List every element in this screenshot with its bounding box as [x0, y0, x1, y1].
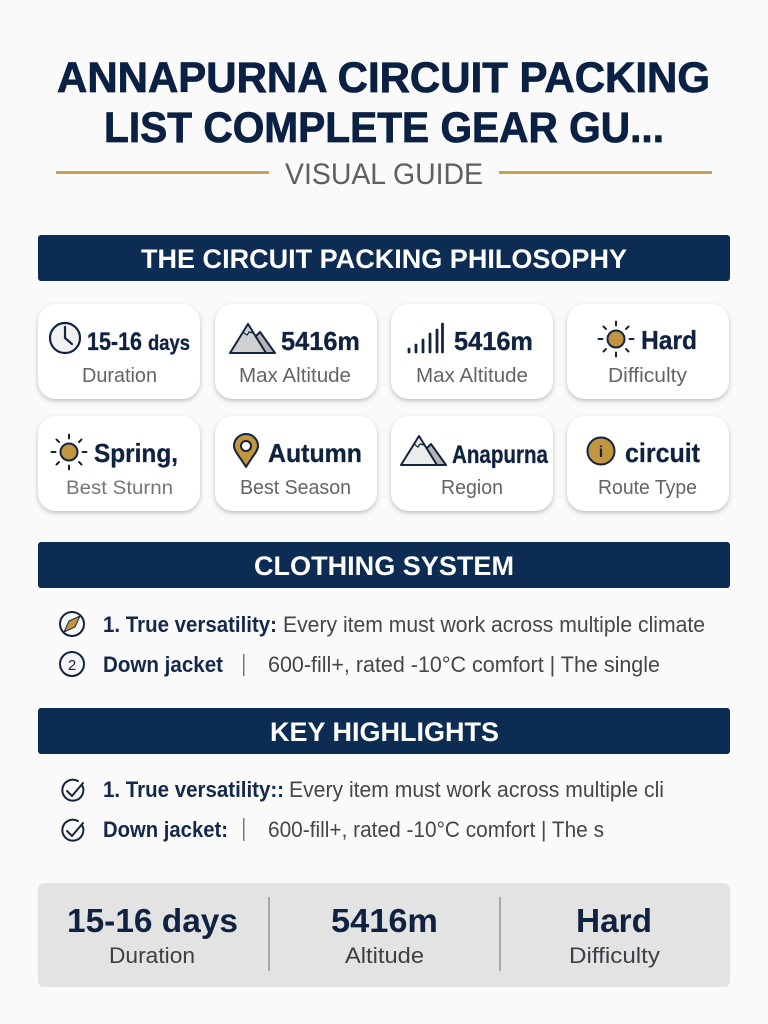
item: down jacket: Down jacket:: [103, 817, 228, 842]
item: true versatility: [103, 612, 705, 637]
item: down jacket: [103, 652, 660, 677]
item: true versatility: Every item must work across multiple cli: [289, 777, 664, 802]
value: circuit: circuit: [625, 438, 700, 468]
value: spring: Spring,: [94, 438, 178, 468]
stat: difficulty: [569, 902, 660, 968]
label: duration: Duration: [82, 365, 157, 387]
value: 5416m: 5416m: [281, 326, 360, 356]
value: hard: Hard: [641, 325, 697, 355]
stat: duration: Duration: [109, 943, 195, 968]
title: LIST COMPLETE GEAR GU...: [104, 104, 664, 152]
label: route type: Route Type: [598, 477, 697, 499]
value: anapurna: Anapurna: [452, 441, 549, 469]
label: difficulty: Difficulty: [608, 365, 687, 387]
heading: clothing system: CLOTHING SYSTEM: [254, 551, 514, 581]
icon: number 2: [60, 652, 84, 676]
icon: sun: [52, 434, 86, 470]
icon: number 2: 2: [68, 657, 76, 674]
item: down jacket: 600-fill+, rated -10°C comfort | The single: [268, 652, 660, 677]
card: max altitude bars: [391, 304, 553, 399]
stat: duration: 15-16 days: [67, 902, 238, 939]
item: down jacket: [103, 817, 604, 842]
value: 15-16 days: [87, 328, 190, 356]
heading: key highlights: [38, 708, 730, 754]
icon: check: [62, 780, 83, 801]
item: down jacket: 600-fill+, rated -10°C comfort | The s: [268, 817, 604, 842]
list: key highlights: [62, 777, 664, 842]
card: duration: [38, 304, 200, 399]
heading: the circuit packing philosophy: [38, 235, 730, 281]
label: best season: Best Season: [240, 477, 351, 499]
stat: difficulty: Difficulty: [569, 943, 660, 968]
item: true versatility: Every item must work across multiple climate: [283, 612, 705, 637]
icon: clock: [50, 323, 80, 353]
label: region: Region: [441, 477, 503, 499]
list: clothing system: [60, 612, 705, 677]
icon: compass: [60, 612, 84, 636]
stat: duration: [67, 902, 238, 968]
value: autumn: Autumn: [268, 438, 362, 468]
stat: altitude: [331, 902, 438, 968]
icon: check: [62, 820, 83, 841]
value: 15-16 days: days: [148, 332, 190, 355]
heading: the circuit packing philosophy: THE CIRCUIT PACKING PHILOSOPHY: [141, 244, 627, 274]
stat: difficulty: Hard: [576, 902, 652, 939]
card: max altitude: [215, 304, 377, 399]
panel: stat cards: [38, 304, 729, 511]
icon: mountain: [230, 324, 275, 353]
icon: info: [588, 438, 614, 464]
title: ANNAPURNA CIRCUIT PACKING: [57, 54, 710, 102]
value: 5416m: 5416m: [454, 326, 533, 356]
icon: info: i: [599, 444, 603, 461]
icon: signal bars: [409, 324, 442, 352]
heading: key highlights: KEY HIGHLIGHTS: [270, 717, 499, 747]
stat: altitude: Altitude: [345, 943, 424, 968]
title: [57, 54, 710, 152]
label: max altitude: Max Altitude: [416, 365, 528, 387]
item: true versatility: 1. True versatility::: [103, 777, 284, 802]
subtitle: visual guide: [56, 158, 712, 191]
heading: clothing system: [38, 542, 730, 588]
label: garbled best season: Best Sturnn: [66, 478, 173, 499]
card: region: [391, 416, 553, 511]
icon: sun: [598, 322, 634, 356]
item: down jacket: Down jacket: [103, 652, 224, 677]
item: true versatility: [103, 777, 664, 802]
icon: mountain: [401, 436, 446, 465]
item: true versatility: 1. True versatility:: [103, 612, 277, 637]
panel: summary stats: [38, 883, 730, 987]
card: route type: [567, 416, 729, 511]
card: spring: [38, 416, 200, 511]
stat: altitude: 5416m: [331, 902, 438, 939]
subtitle: visual guide: VISUAL GUIDE: [285, 158, 483, 191]
value: 15-16 days: 15-16: [87, 328, 142, 356]
card: difficulty: [567, 304, 729, 399]
label: max altitude: Max Altitude: [239, 365, 351, 387]
card: autumn: [215, 416, 377, 511]
icon: map pin: [234, 434, 258, 467]
